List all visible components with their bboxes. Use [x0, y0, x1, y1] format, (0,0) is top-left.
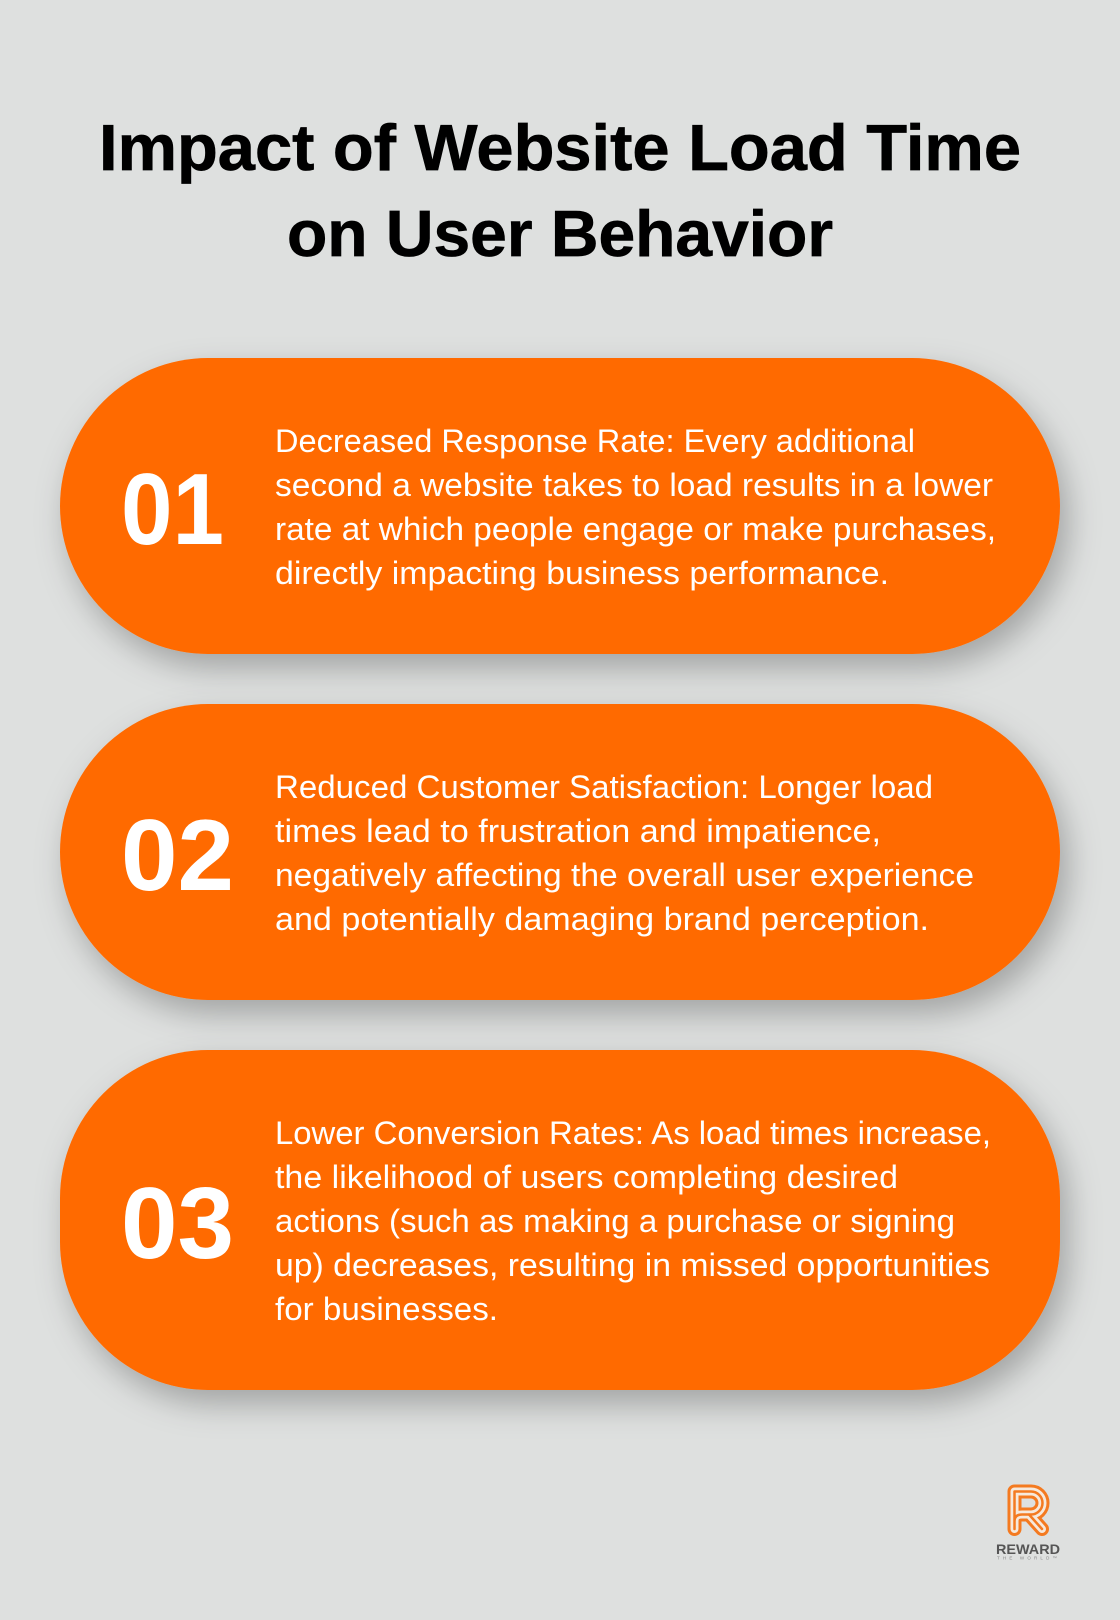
text block 1: rate at which people engage or make purchases,: [275, 511, 996, 547]
panel: lower conversion rates: [60, 1050, 1060, 1390]
text block 2: and potentially damaging brand perception.: [275, 901, 929, 937]
text block 1: second a website takes to load results in a lower: [275, 467, 993, 503]
text block 2: [275, 769, 974, 937]
logo: Reward the World: [996, 1492, 1060, 1560]
number 01: 01: [121, 454, 224, 566]
number 02: 02: [121, 800, 234, 912]
pill background 3: [60, 1050, 1060, 1390]
panel: reduced customer satisfaction: [60, 704, 1060, 1000]
text block 2: negatively affecting the overall user experience: [275, 857, 974, 893]
text block 2: times lead to frustration and impatience,: [275, 813, 881, 849]
text block 3: the likelihood of users completing desired: [275, 1159, 898, 1195]
title: Impact of Website Load Time: [99, 111, 1021, 184]
title: on User Behavior: [287, 197, 833, 270]
text block 1: [275, 423, 996, 591]
text block 3: Lower Conversion Rates: As load times increase,: [275, 1115, 991, 1151]
logo tagline: THE WORLD™: [997, 1556, 1057, 1560]
text block 1: directly impacting business performance.: [275, 555, 889, 591]
title: [99, 111, 1021, 270]
icon: R mark: [1014, 1492, 1042, 1529]
text block 1: Decreased Response Rate: Every additional: [275, 423, 915, 459]
logo wordmark: REWARD: [996, 1541, 1060, 1557]
pill background 2: [60, 704, 1060, 1000]
number 03: 03: [121, 1168, 234, 1280]
text block 2: Reduced Customer Satisfaction: Longer load: [275, 769, 933, 805]
text block 3: actions (such as making a purchase or signing: [275, 1203, 955, 1239]
text block 3: [275, 1115, 991, 1327]
text block 3: up) decreases, resulting in missed opportunities: [275, 1247, 990, 1283]
text block 3: for businesses.: [275, 1291, 498, 1327]
panel: decreased response rate: [60, 358, 1060, 654]
pill background 1: [60, 358, 1060, 654]
